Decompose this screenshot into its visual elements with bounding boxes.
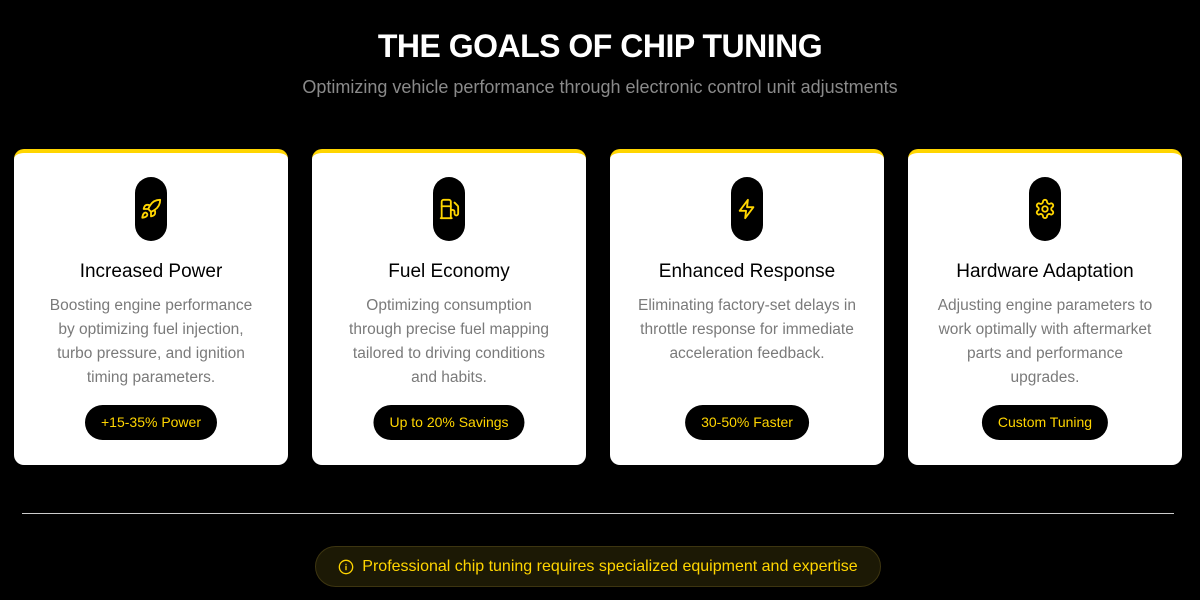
icon: lightning bbox=[731, 177, 763, 241]
panel: hardware adaptation bbox=[908, 149, 1182, 465]
card description: Adjusting engine parameters to bbox=[938, 297, 1152, 314]
callout bbox=[315, 546, 881, 587]
card description: Boosting engine performance bbox=[50, 297, 252, 314]
card description: throttle response for immediate bbox=[640, 321, 854, 338]
icon: rocket bbox=[135, 177, 167, 241]
title: THE GOALS OF CHIP TUNING bbox=[378, 28, 822, 64]
card description bbox=[50, 297, 252, 386]
icon: gear bbox=[1029, 177, 1061, 241]
card description: timing parameters. bbox=[87, 369, 215, 386]
card description: and habits. bbox=[411, 369, 487, 386]
icon: fuel pump bbox=[433, 177, 465, 241]
badge bbox=[373, 405, 525, 440]
card description: upgrades. bbox=[1011, 369, 1079, 386]
badge bbox=[85, 405, 217, 440]
badge: 30-50% Faster bbox=[701, 414, 793, 430]
card description bbox=[938, 297, 1152, 386]
card description: by optimizing fuel injection, bbox=[58, 321, 244, 338]
panel: increased power bbox=[14, 149, 288, 465]
badge bbox=[685, 405, 809, 440]
panel: enhanced response bbox=[610, 149, 884, 465]
callout: Professional chip tuning requires specialized equipment and expertise bbox=[362, 558, 858, 574]
card title: Increased Power bbox=[80, 261, 222, 282]
badge: Custom Tuning bbox=[998, 414, 1092, 430]
card description: work optimally with aftermarket bbox=[939, 321, 1151, 338]
card description: tailored to driving conditions bbox=[353, 345, 545, 362]
card title: Fuel Economy bbox=[388, 261, 510, 282]
card description: Eliminating factory-set delays in bbox=[638, 297, 856, 314]
card title: Hardware Adaptation bbox=[956, 261, 1134, 282]
card description: Optimizing consumption bbox=[366, 297, 532, 314]
card description: parts and performance bbox=[967, 345, 1123, 362]
panel: fuel economy bbox=[312, 149, 586, 465]
badge: +15-35% Power bbox=[101, 414, 201, 430]
card description: turbo pressure, and ignition bbox=[57, 345, 245, 362]
card description bbox=[349, 297, 549, 386]
card title: Enhanced Response bbox=[659, 261, 835, 282]
card description bbox=[638, 297, 856, 362]
badge: Up to 20% Savings bbox=[389, 414, 509, 430]
card description: acceleration feedback. bbox=[669, 345, 825, 362]
subtitle: Optimizing vehicle performance through electronic control unit adjustments bbox=[302, 77, 898, 97]
card description: through precise fuel mapping bbox=[349, 321, 549, 338]
badge bbox=[982, 405, 1108, 440]
